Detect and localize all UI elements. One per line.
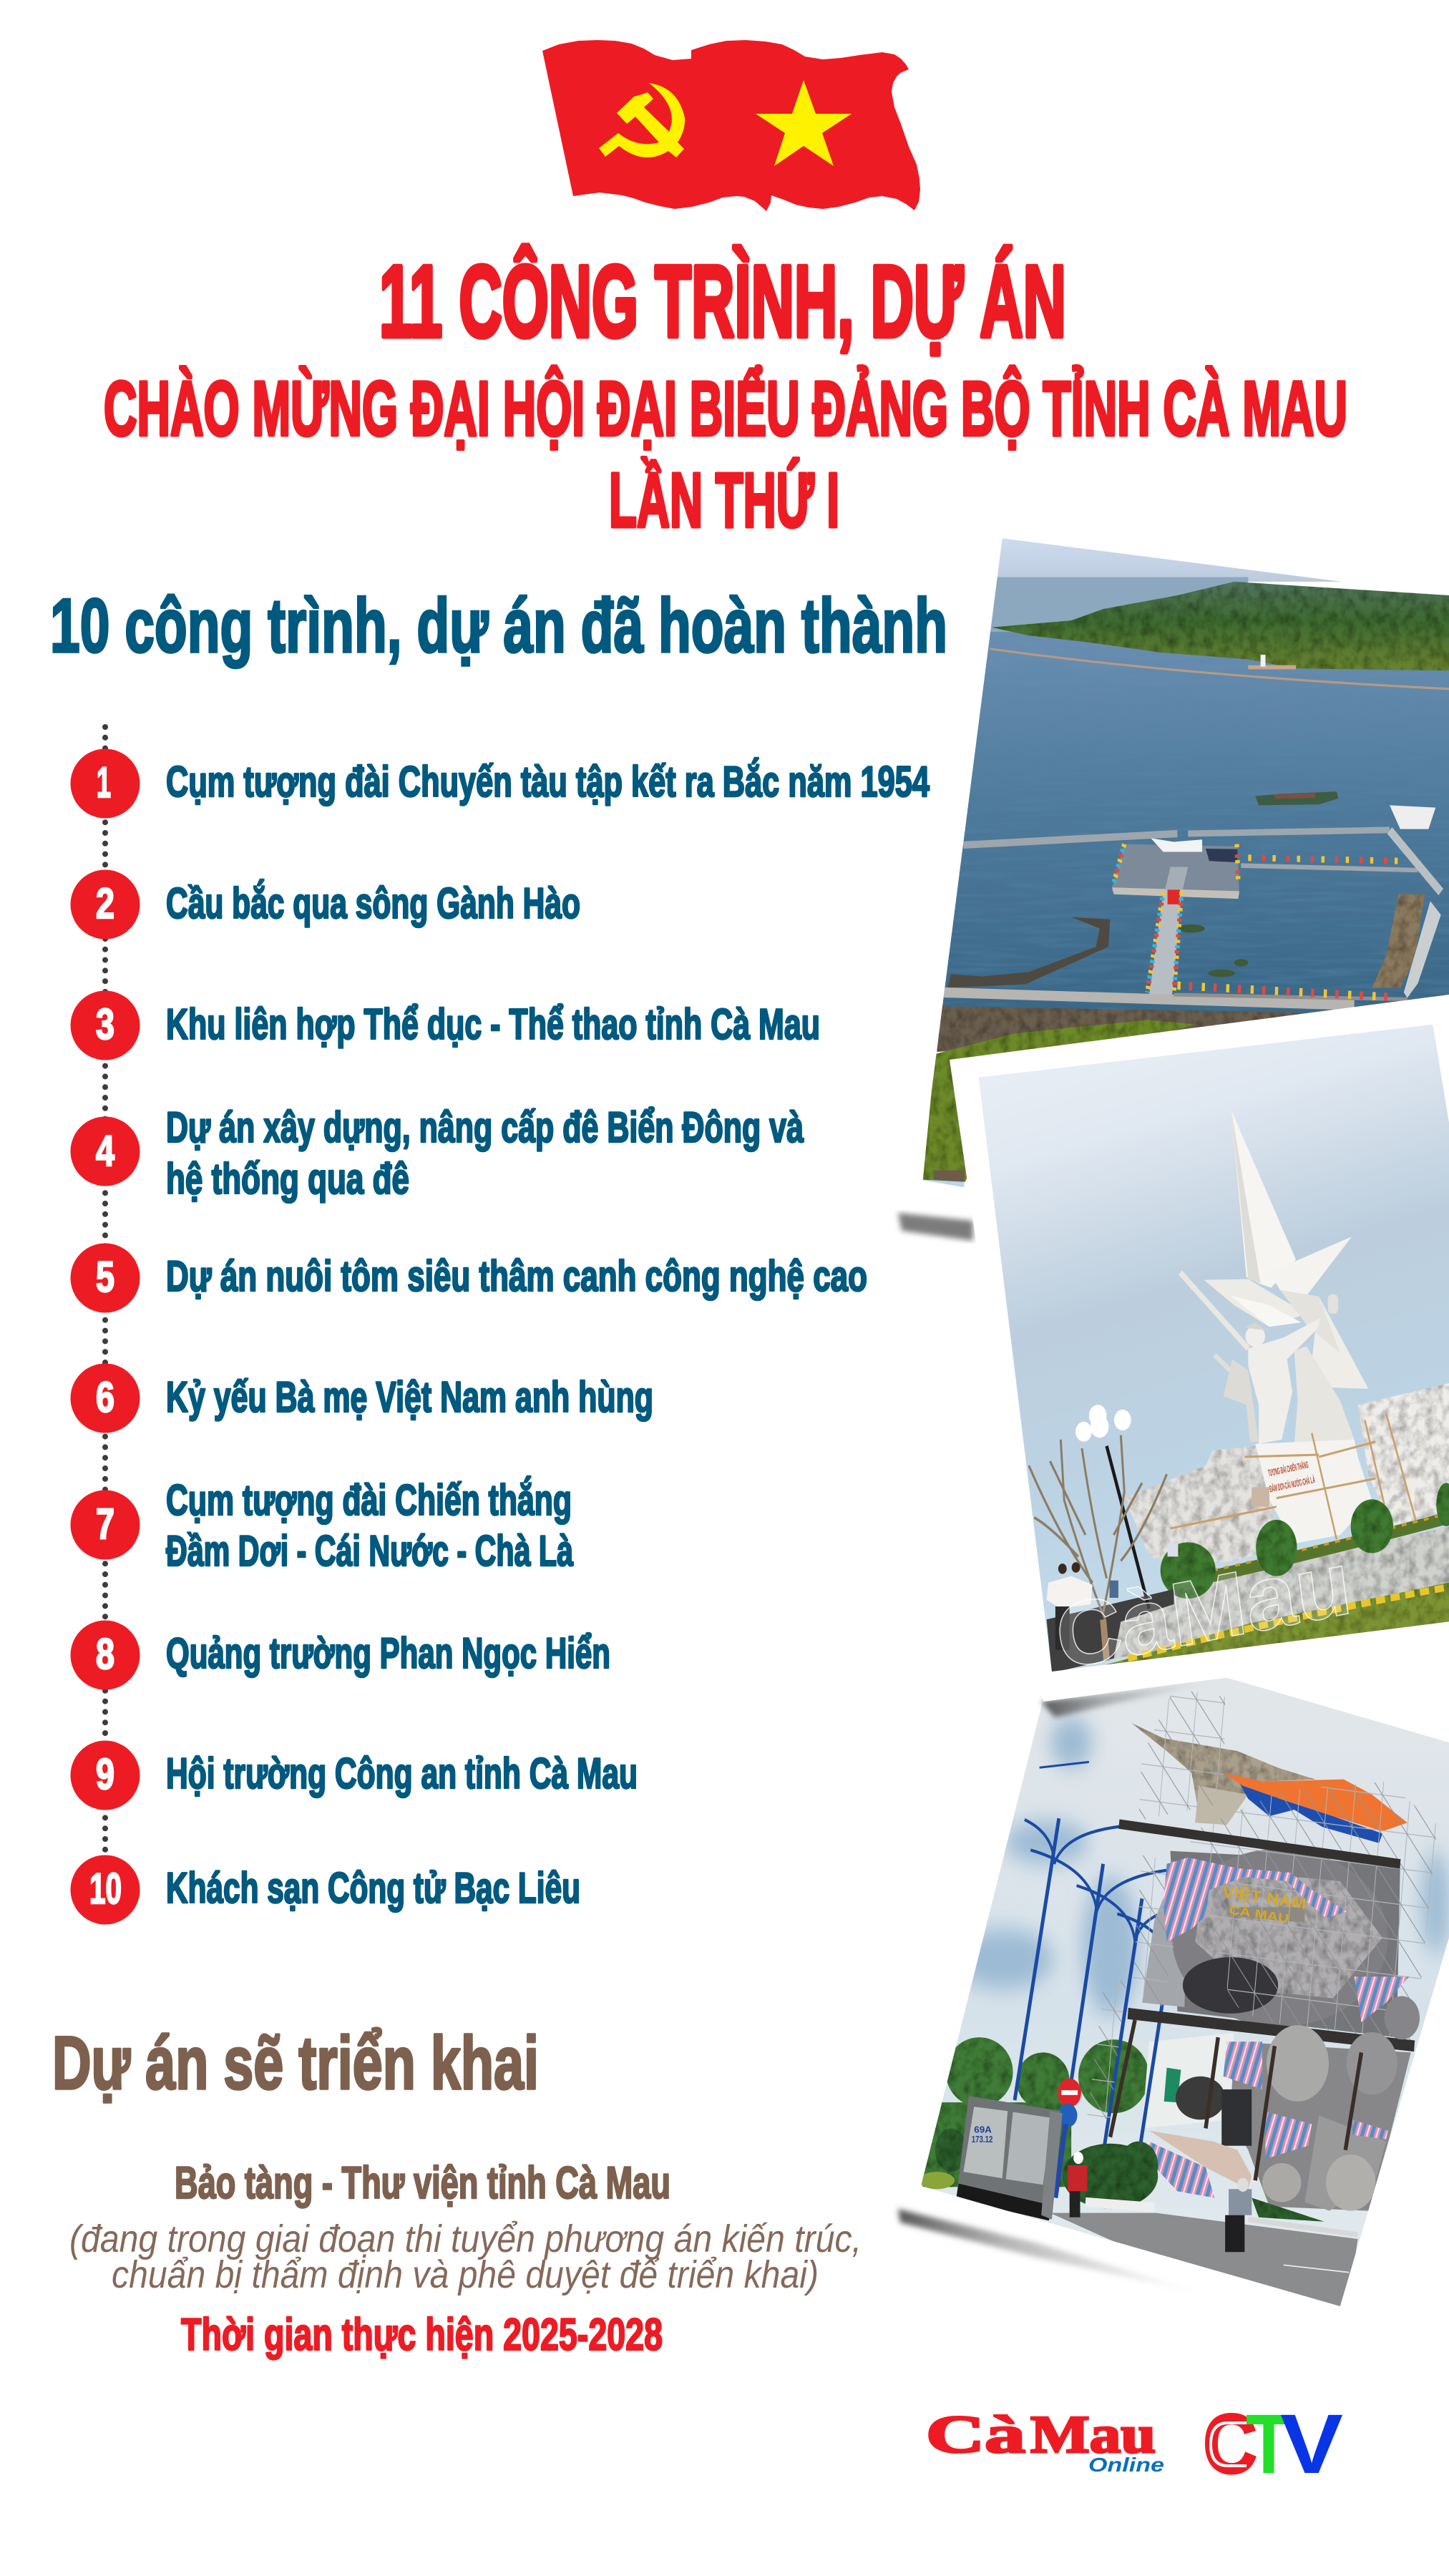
platform <box>1112 844 1239 894</box>
item 10 <box>70 1855 580 1925</box>
title line 3: LẦN THỨ I <box>609 457 839 543</box>
logo: CTV: T <box>1246 2397 1292 2492</box>
tower backdrop <box>1171 1851 1400 2037</box>
project status note: (đang trong giai đoạn thi tuyển phương án kiến trúc, <box>69 2218 862 2260</box>
bare tree <box>1029 1435 1167 1661</box>
photo 1: pier aerial view <box>894 522 1449 1187</box>
list of completed projects <box>70 727 930 1925</box>
item 5: Dự án nuôi tôm siêu thâm canh công nghệ cao <box>166 1252 867 1300</box>
item 1: 1 <box>97 758 111 806</box>
item 6: 6 <box>96 1373 114 1421</box>
item 9: Hội trường Công an tỉnh Cà Mau <box>166 1750 638 1797</box>
item 5 <box>70 1244 867 1312</box>
blue street lights <box>1013 1760 1166 2144</box>
item 10: 10 <box>89 1865 122 1913</box>
piers <box>963 830 1441 892</box>
item 7: Cụm tượng đài Chiến thắng <box>166 1476 572 1524</box>
people <box>1047 1487 1269 1650</box>
plinth inscription <box>1267 1458 1316 1495</box>
item 10: Khách sạn Công tử Bạc Liêu <box>166 1864 580 1912</box>
bamboo scaffold <box>1171 1413 1418 1539</box>
project status note <box>69 2218 862 2296</box>
flag cloth <box>542 40 920 211</box>
hammer and sickle <box>599 83 685 157</box>
orange tarp <box>1224 1773 1407 1831</box>
logos <box>926 2397 1343 2492</box>
globe lettering: VIỆT NAM <box>1221 1882 1307 1913</box>
item 2 <box>70 870 580 939</box>
item 1: Cụm tượng đài Chuyến tàu tập kết ra Bắc năm 1954 <box>166 758 930 806</box>
shoreline right <box>1372 894 1425 988</box>
item 4: Dự án xây dựng, nâng cấp đê Biển Đông và <box>166 1103 804 1151</box>
logo: Cà Mau Online: Online <box>1088 2454 1164 2476</box>
barge <box>1255 791 1338 805</box>
heading: completed projects: 10 công trình, dự án đã hoàn thành <box>50 582 947 668</box>
item 2: 2 <box>96 879 114 927</box>
hedge <box>1213 1518 1449 1576</box>
rock spit <box>947 917 1111 988</box>
star <box>756 80 852 166</box>
foreground land <box>937 1006 1319 1052</box>
globe <box>1172 1849 1388 2026</box>
steps <box>1047 1589 1174 1673</box>
item 8: 8 <box>96 1630 114 1678</box>
project status note: chuẩn bị thẩm định và phê duyệt để triển khai) <box>112 2253 819 2296</box>
item 7: Đầm Dơi - Cái Nước - Chà Là <box>166 1527 573 1575</box>
item 4: hệ thống qua đê <box>166 1155 409 1203</box>
item 5: 5 <box>96 1253 114 1301</box>
relief walls <box>1358 1383 1449 1526</box>
far land <box>992 582 1449 670</box>
title <box>104 244 1347 543</box>
shrubs <box>935 2128 1324 2222</box>
lighthouse <box>1248 655 1296 669</box>
item 2: Cầu bắc qua sông Gành Hào <box>166 879 580 927</box>
photo 3: monument under construction: 69A <box>974 2124 992 2135</box>
photo 2: victory monument: TƯỢNG ĐÀI CHIẾN THẮNG <box>1267 1458 1309 1479</box>
lamp <box>1107 1446 1149 1609</box>
item 1 <box>70 748 930 819</box>
dotted timeline <box>102 727 108 1889</box>
globe lettering: CÀ MAU <box>1229 1903 1289 1926</box>
building <box>1142 2033 1234 2128</box>
item 9: 9 <box>96 1750 114 1798</box>
item 3: Khu liên hợp Thể dục - Thể thao tỉnh Cà Mau <box>166 1000 820 1048</box>
flag <box>542 40 920 211</box>
motorbike riders <box>1068 2152 1252 2252</box>
upcoming project block <box>52 2021 862 2360</box>
traffic signs <box>1058 2079 1081 2107</box>
item 4 <box>70 1103 804 1203</box>
decks <box>1119 1824 1415 2115</box>
item 8: Quảng trường Phan Ngọc Hiển <box>166 1629 610 1677</box>
flower bed <box>1071 1583 1449 1674</box>
implementation time: Thời gian thực hiện 2025-2028 <box>181 2310 663 2360</box>
item 4: 4 <box>96 1127 114 1175</box>
photo 2 shadow on photo 3 <box>1041 1682 1216 1717</box>
road <box>1050 2213 1358 2311</box>
logo: CTV: V <box>1280 2397 1343 2492</box>
item 3: 3 <box>96 1000 114 1048</box>
item 6: Kỷ yếu Bà mẹ Việt Nam anh hùng <box>166 1373 653 1421</box>
stone wall <box>1113 1526 1449 1659</box>
spire <box>1231 1110 1296 1288</box>
colourful flags <box>1113 844 1400 997</box>
star arms <box>1269 1236 1352 1305</box>
bottom bridge <box>944 992 1355 1005</box>
plinth <box>1255 1440 1372 1543</box>
scaffold over globe <box>1188 1782 1438 2046</box>
photo frame shadow <box>898 1213 973 1241</box>
small islets <box>1178 924 1248 977</box>
trees <box>923 2037 1149 2187</box>
lower base <box>1231 2041 1411 2211</box>
truck <box>957 2096 1060 2220</box>
watermark: CàMau <box>1050 1531 1357 1689</box>
item 7 <box>70 1476 573 1575</box>
item 3 <box>70 990 820 1060</box>
logo: Cà Mau Online: Cà <box>926 2406 1025 2464</box>
photo 3 bottom shadow <box>898 2209 1202 2293</box>
photo 3: monument under construction <box>921 1677 1449 2306</box>
vertical pier <box>1149 892 1181 995</box>
logo: CTV <box>1203 2397 1343 2492</box>
globe lettering <box>1221 1882 1307 1926</box>
heading: upcoming project: Dự án sẽ triển khai <box>52 2021 539 2105</box>
logo: Cà Mau Online <box>926 2406 1164 2476</box>
scaffold top <box>1138 1688 1225 1820</box>
blue tarp <box>1237 1780 1382 1843</box>
item 6 <box>70 1364 653 1433</box>
item 7: 7 <box>96 1500 114 1548</box>
striped tarps <box>1163 1858 1409 2022</box>
soldiers <box>1180 1272 1355 1446</box>
covered rock <box>1149 2131 1252 2189</box>
project name: Bảo tàng - Thư viện tỉnh Cà Mau <box>175 2158 670 2208</box>
logo: CTV: C <box>1203 2397 1257 2492</box>
item 8 <box>70 1620 610 1690</box>
photo 2: victory monument: ĐẦM DƠI-CÁI NƯỚC-CHÀ LÀ <box>1269 1473 1316 1495</box>
photo 2: victory monument <box>894 1023 1449 1689</box>
photo 3: monument under construction: 173.12 <box>972 2134 993 2145</box>
photo 2 white frame <box>950 995 1449 1702</box>
sculpture top <box>1131 1723 1315 1816</box>
sea wall <box>990 649 1449 689</box>
logo: Cà Mau Online: Mau <box>1030 2406 1156 2464</box>
shrubs <box>1161 1483 1449 1599</box>
item 9 <box>70 1740 638 1810</box>
